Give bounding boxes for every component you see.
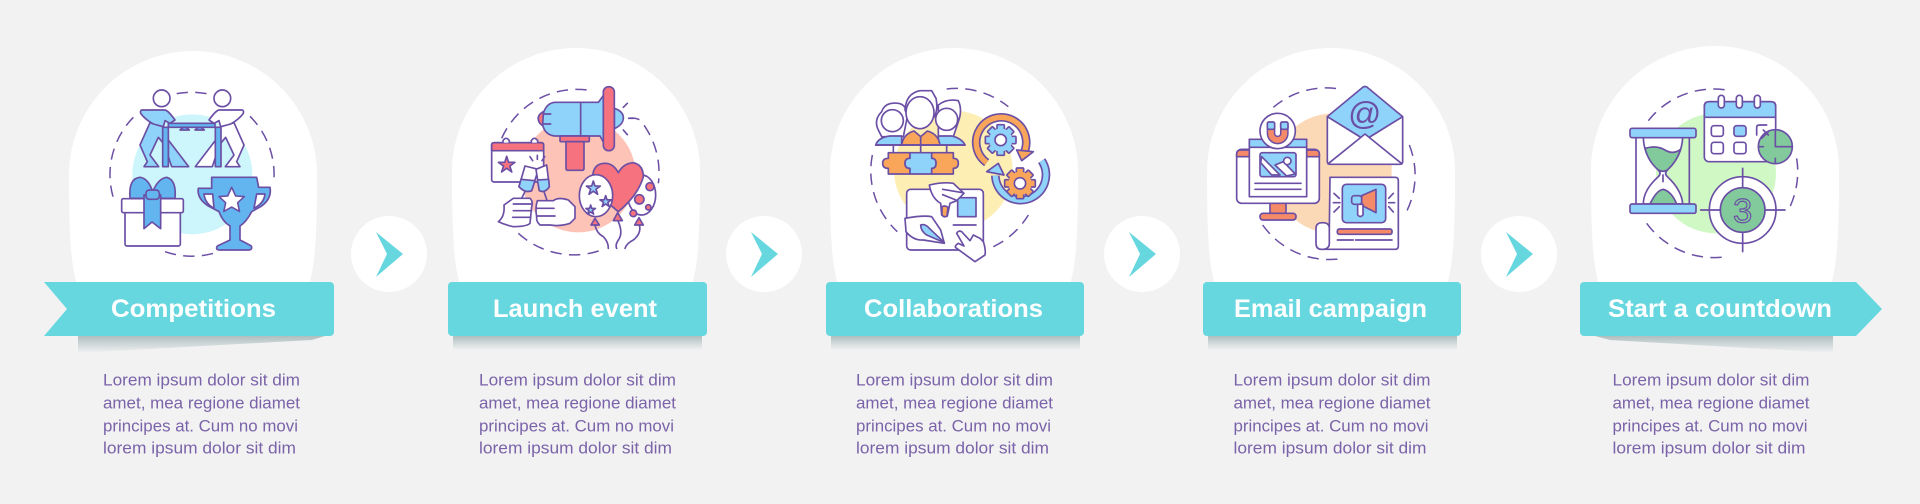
description text: principes at. Cum no movi — [103, 416, 298, 436]
description text: amet, mea regione diamet — [1234, 394, 1431, 412]
arch card — [1207, 48, 1455, 295]
description text — [479, 370, 676, 458]
panel: start a countdown — [1580, 46, 1882, 458]
description text: principes at. Cum no movi — [479, 416, 674, 436]
heading: Competitions — [111, 295, 276, 323]
heading: Start a countdown — [1608, 295, 1832, 323]
description text: amet, mea regione diamet — [479, 394, 676, 412]
illustration: collaborations — [871, 88, 1046, 262]
description text — [1612, 370, 1810, 458]
panel: launch event — [448, 48, 707, 458]
description text: Lorem ipsum dolor sit dim — [1612, 370, 1810, 390]
arrow button 1 — [351, 216, 427, 292]
arch card — [830, 48, 1078, 295]
ribbon banner — [1203, 282, 1461, 336]
description text: lorem ipsum dolor sit dim — [1612, 438, 1806, 458]
panel: collaborations — [826, 48, 1084, 458]
heading: Launch event — [493, 295, 658, 323]
countdown number: 3 — [1733, 192, 1752, 230]
heading: Email campaign — [1234, 295, 1427, 323]
panel: email campaign — [1203, 48, 1461, 458]
illustration: competitions — [110, 90, 274, 256]
description text: amet, mea regione diamet — [103, 394, 300, 412]
panel: competitions — [44, 51, 334, 458]
ribbon shadow — [831, 336, 1080, 350]
ribbon banner — [826, 282, 1084, 336]
description text: amet, mea regione diamet — [856, 394, 1053, 412]
ribbon banner — [1580, 282, 1882, 336]
arrow button 2 — [726, 216, 802, 292]
ribbon shadow — [1595, 336, 1833, 353]
description text: lorem ipsum dolor sit dim — [856, 438, 1049, 458]
description text: principes at. Cum no movi — [856, 416, 1051, 436]
arch card — [1591, 46, 1839, 295]
arrow button 4 — [1481, 216, 1557, 292]
description text: Lorem ipsum dolor sit dim — [1234, 370, 1430, 390]
illustration: email campaign — [1237, 86, 1415, 260]
description text: amet, mea regione diamet — [1612, 394, 1810, 412]
ribbon shadow — [78, 336, 325, 353]
ribbon shadow — [1208, 336, 1457, 350]
ribbon banner — [448, 282, 707, 336]
heading: Collaborations — [864, 295, 1043, 323]
ribbon shadow — [453, 336, 702, 350]
description text: principes at. Cum no movi — [1234, 416, 1428, 436]
arch card — [452, 48, 700, 295]
description text: principes at. Cum no movi — [1612, 416, 1808, 436]
description text: Lorem ipsum dolor sit dim — [103, 370, 300, 390]
arrow button 3 — [1104, 216, 1180, 292]
arch card — [69, 51, 317, 295]
illustration: start a countdown — [1630, 89, 1817, 258]
illustration: launch event — [492, 87, 659, 255]
ribbon banner — [44, 282, 334, 336]
description text: lorem ipsum dolor sit dim — [479, 438, 672, 458]
description text: lorem ipsum dolor sit dim — [103, 438, 296, 458]
description text: lorem ipsum dolor sit dim — [1234, 438, 1426, 458]
description text — [103, 370, 300, 458]
description text — [856, 370, 1053, 458]
description text: Lorem ipsum dolor sit dim — [479, 370, 676, 390]
description text: Lorem ipsum dolor sit dim — [856, 370, 1053, 390]
description text — [1234, 370, 1431, 458]
at sign: @ — [1348, 94, 1381, 131]
